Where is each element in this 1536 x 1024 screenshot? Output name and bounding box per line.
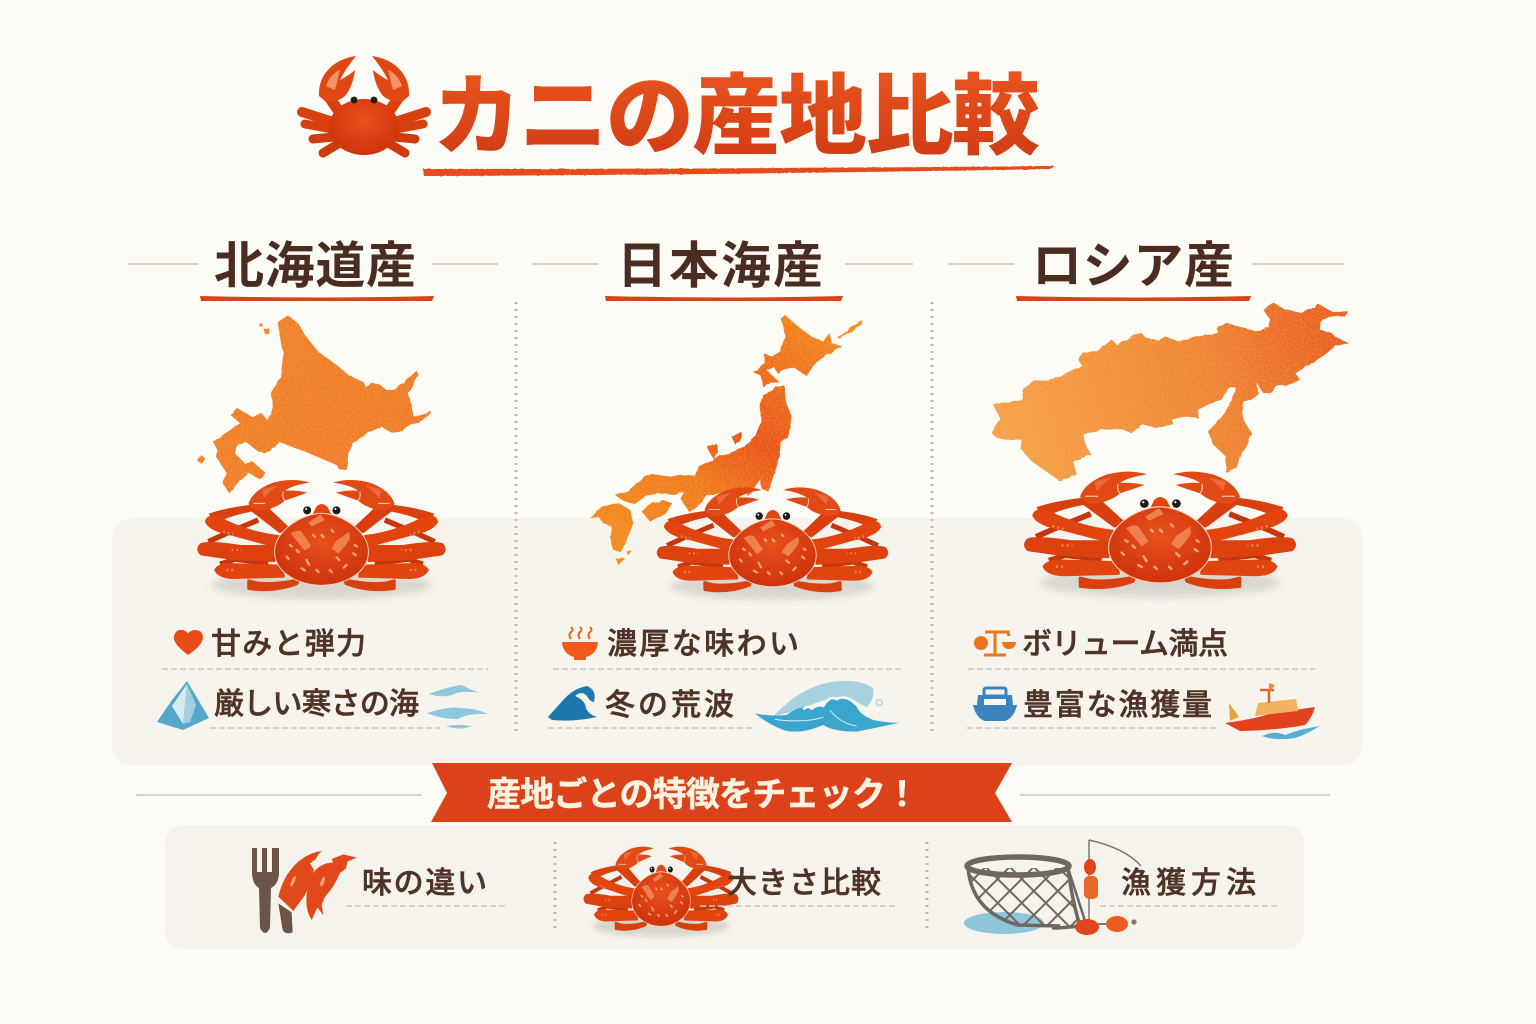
icon: small waves (427, 685, 488, 728)
crab: Hokkaido (199, 480, 444, 599)
banner (136, 763, 1330, 822)
trait: rich taste (553, 627, 902, 669)
trait: rich taste: 濃厚な味わい (607, 628, 799, 661)
trait: sweetness: 甘みと弾力 (211, 628, 366, 661)
heading: Russia (948, 238, 1344, 301)
column: Russia (948, 238, 1348, 739)
item: taste difference: 味の違い (362, 867, 487, 900)
map: Hokkaido (197, 315, 432, 493)
icon: crab claws (278, 851, 357, 933)
panel: comparison row (165, 825, 1304, 949)
heading: Hokkaido (128, 238, 498, 301)
divider 1 (514, 302, 518, 735)
column: Sea of Japan (532, 238, 913, 732)
trait: sweetness (162, 628, 488, 669)
map: Russia (992, 303, 1348, 481)
item: size comparison: 大きさ比較 (727, 867, 881, 900)
item: fishing method: 漁獲方法 (1121, 867, 1256, 900)
icon: fork (252, 848, 279, 933)
divider 2 (930, 302, 934, 735)
item: size comparison (585, 847, 895, 937)
column: Hokkaido (128, 238, 498, 730)
trait: cold sea (157, 681, 488, 730)
trait: abundant catch (967, 683, 1320, 739)
trait: cold sea: 厳しい寒さの海 (214, 688, 419, 721)
crab: Russia (1026, 472, 1294, 597)
heading: Sea of Japan (532, 238, 913, 301)
icon: title crab (302, 56, 426, 155)
map: Japan (590, 315, 862, 565)
item: fishing method (964, 840, 1277, 935)
banner: 産地ごとの特徴をチェック！ (487, 776, 919, 814)
title text: カニの産地比較 (433, 67, 1040, 166)
icon: fishing boat (1225, 683, 1320, 739)
crab: Sea of Japan (658, 487, 887, 600)
item: taste difference (252, 848, 507, 933)
trait: volume (968, 628, 1315, 669)
trait: winter waves: 冬の荒波 (605, 689, 734, 722)
heading: Sea of Japan: 日本海産 (617, 238, 823, 294)
trait: winter waves (548, 681, 900, 732)
heading: Russia: ロシア産 (1032, 238, 1234, 294)
main title block (302, 56, 1055, 176)
panel: feature background (112, 518, 1362, 766)
heading: Hokkaido: 北海道産 (214, 238, 416, 294)
trait: volume: ボリューム満点 (1022, 628, 1228, 661)
icon: net and floats (964, 840, 1141, 935)
title underline (423, 166, 1055, 176)
trait: abundant catch: 豊富な漁獲量 (1023, 689, 1212, 722)
icon: large wave (755, 681, 900, 732)
